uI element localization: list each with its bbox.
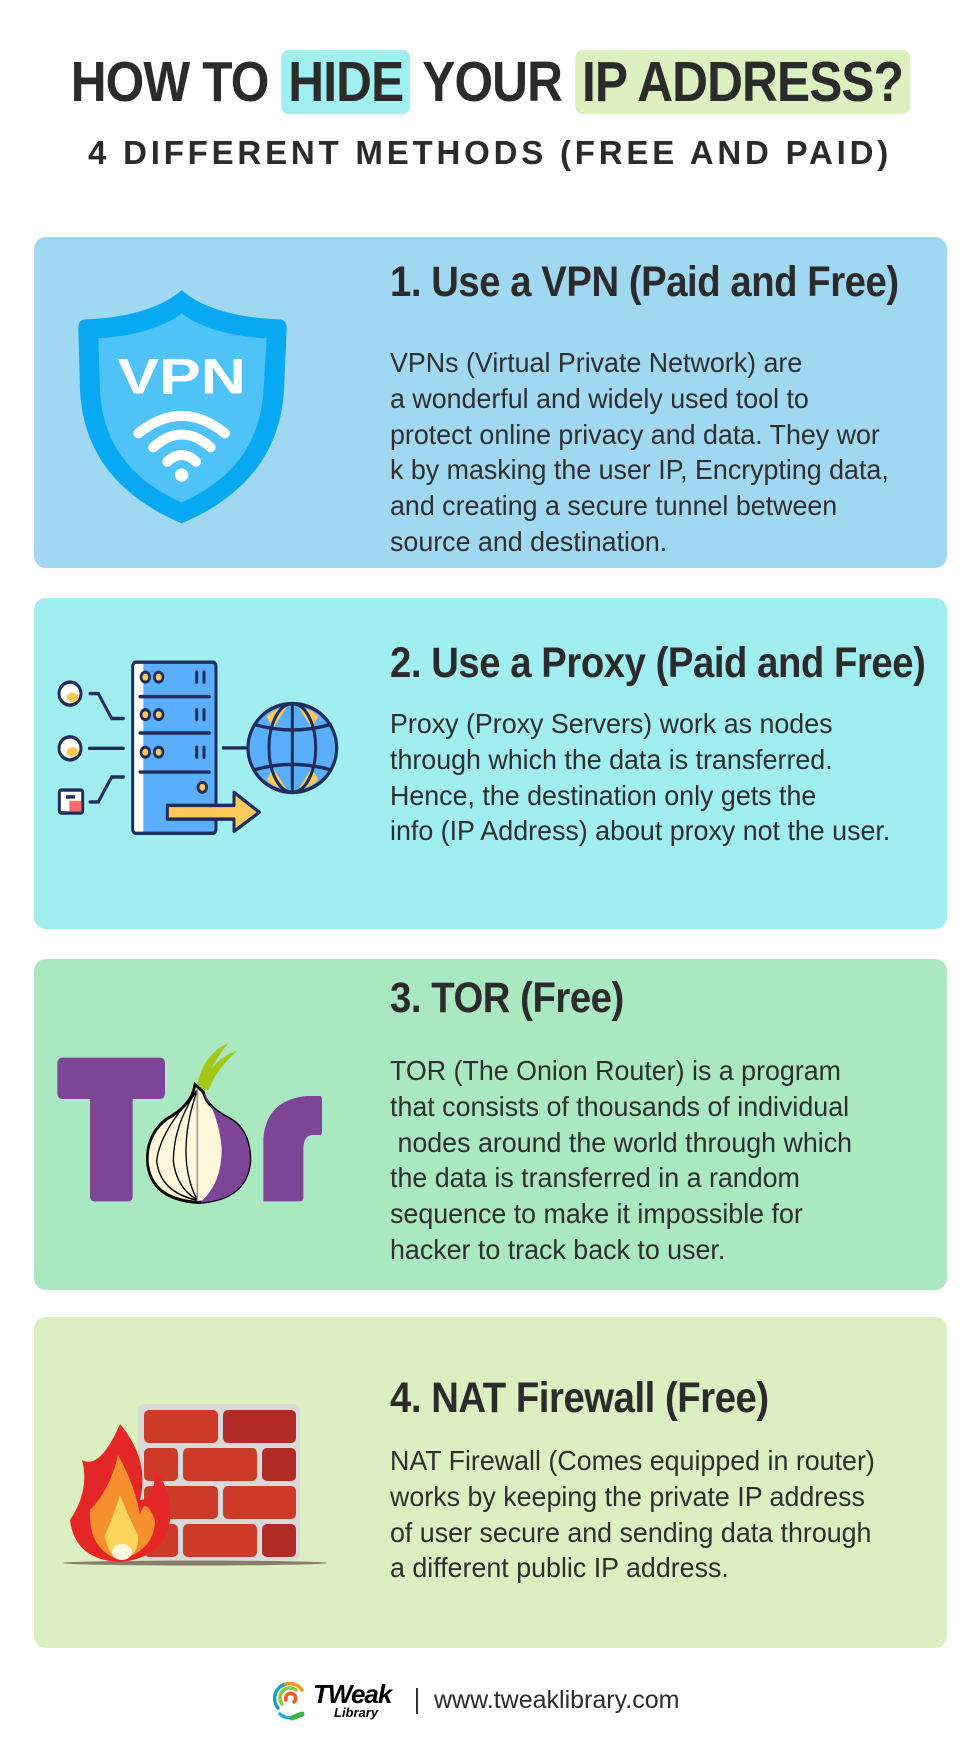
text: NAT Firewall: NAT Firewall (Comes equipped in router) [390,1445,875,1476]
text: VPN: source and destination. [390,526,667,557]
text: TOR: TOR (The Onion Router) is a program [390,1055,841,1086]
text: Proxy [390,708,890,846]
icon: Tor logo [57,1043,322,1204]
icon: VPN shield [78,290,287,524]
text: Proxy: info (IP Address) about proxy not the user. [390,815,890,846]
heading: Proxy: 2. Use a Proxy (Paid and Free) [390,639,925,687]
text: url: www.tweaklibrary.com [434,1686,679,1714]
panel: VPN [34,237,947,568]
text: Proxy: Proxy (Proxy Servers) work as nodes [390,708,833,739]
text: Proxy: through which the data is transferred. [390,744,833,775]
text: VPN [390,347,889,557]
text: TOR [390,1055,852,1265]
icon: VPN shield: VPN [118,348,246,404]
text: NAT Firewall: a different public IP address. [390,1552,729,1583]
text: VPN: k by masking the user IP, Encrypting data, [390,454,889,485]
panel: Proxy [34,598,947,929]
footer: logo and url [272,1679,679,1720]
icon: firewall [63,1404,327,1566]
text: Proxy: Hence, the destination only gets the [390,780,816,811]
heading: TOR: 3. TOR (Free) [390,974,624,1022]
text: TOR: hacker to track back to user. [390,1234,725,1265]
text: NAT Firewall: of user secure and sending data through [390,1517,871,1548]
panel: NAT Firewall [34,1317,947,1648]
heading: VPN: 1. Use a VPN (Paid and Free) [390,258,899,306]
icon: proxy server [58,660,338,835]
text: TOR: the data is transferred in a random [390,1162,800,1193]
text: TOR: nodes around the world through which [397,1127,852,1158]
panel: TOR [34,959,947,1290]
heading: NAT Firewall: 4. NAT Firewall (Free) [390,1374,769,1422]
text: VPN: and creating a secure tunnel between [390,490,837,521]
text: TOR: sequence to make it impossible for [390,1198,803,1229]
text: tweak library: TWeak [313,1679,391,1709]
text: NAT Firewall: works by keeping the private IP address [390,1481,865,1512]
title: HOW TO HIDE YOUR IP ADDRESS? [70,50,903,114]
text: VPN: protect online privacy and data. They wor [390,419,880,450]
text: NAT Firewall [390,1445,875,1583]
text: VPN: a wonderful and widely used tool to [390,383,809,414]
subtitle: 4 DIFFERENT METHODS (FREE AND PAID) [88,134,892,171]
icon: tweak logo [272,1682,304,1720]
text: VPN: VPNs (Virtual Private Network) are [390,347,802,378]
footer: logo and url: Library [334,1705,378,1720]
text: TOR: that consists of thousands of individual [390,1091,849,1122]
